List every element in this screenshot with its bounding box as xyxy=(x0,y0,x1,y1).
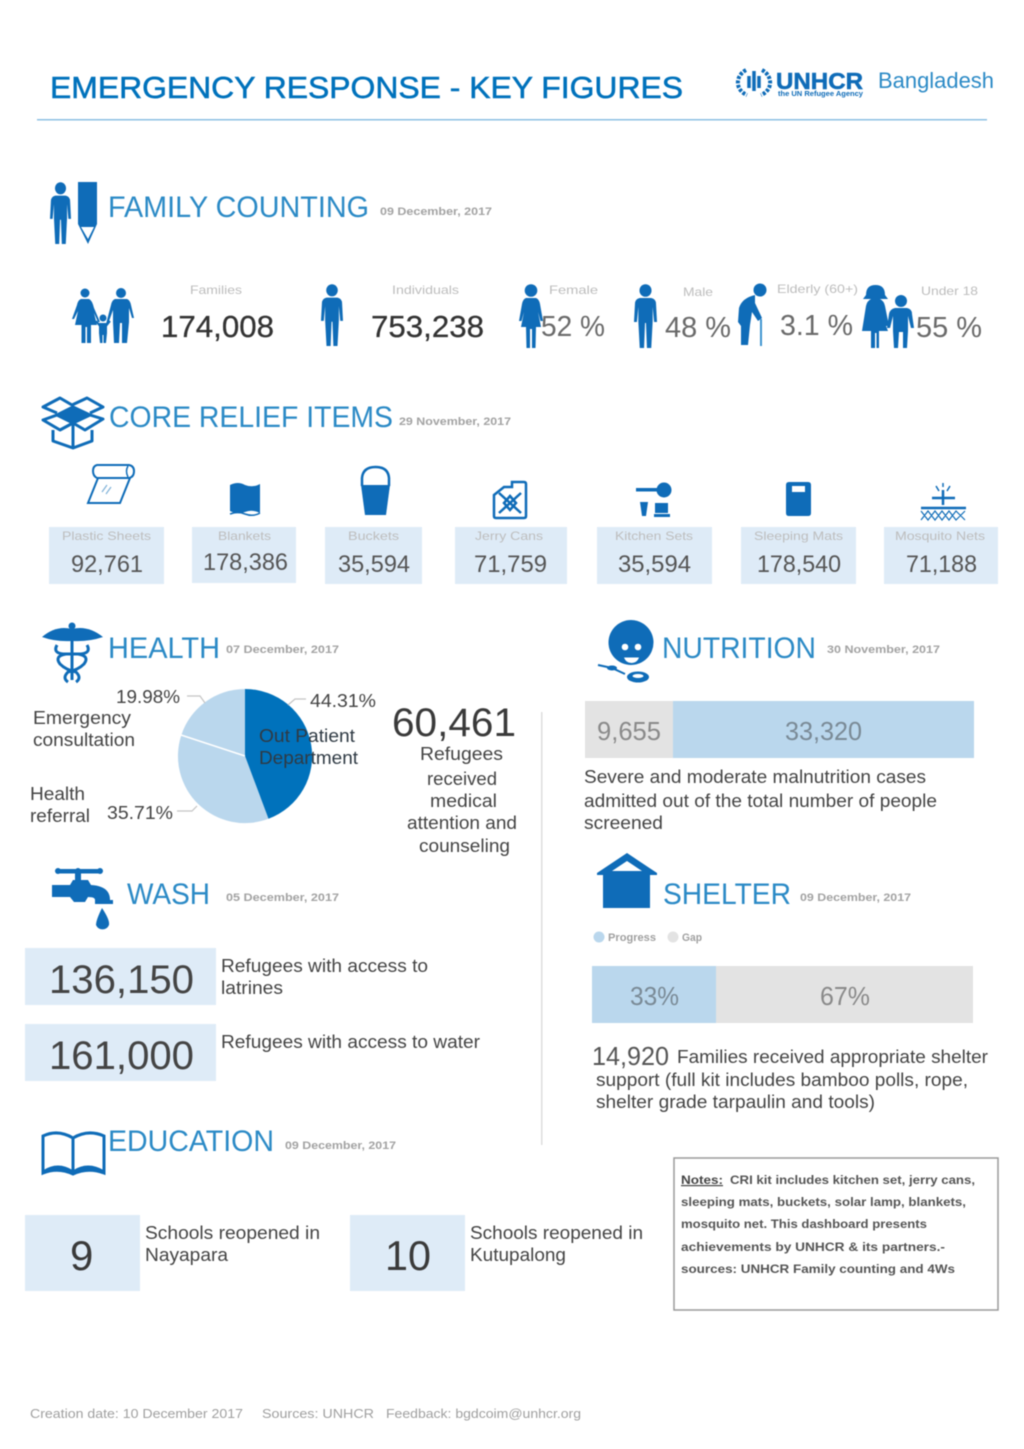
bar: malnutrition cases xyxy=(585,701,974,758)
text: shelter description: Families received appropriate shelter xyxy=(677,1047,988,1067)
card: jerry cans: Jerry Cans xyxy=(475,529,543,543)
text: Kutupalong schools: Kutupalong xyxy=(470,1245,566,1265)
text: latrines xyxy=(221,956,428,998)
card: mosquito nets xyxy=(884,527,998,584)
pie labels: 35.71% xyxy=(107,803,173,823)
callout: notes: CRI kit includes kitchen set, jerry cans, xyxy=(730,1173,975,1187)
text: Kutupalong schools xyxy=(470,1223,643,1265)
icon: sleeping mat xyxy=(786,482,811,516)
icon: UNHCR wreath xyxy=(738,70,770,95)
date: 09 December, 2017 xyxy=(285,1140,396,1152)
date: 09 December, 2017 xyxy=(380,206,492,218)
icon: family xyxy=(72,288,134,343)
pie labels: Health xyxy=(30,784,85,804)
pie labels xyxy=(30,687,376,826)
date: 30 November, 2017 xyxy=(827,644,940,656)
panel: education xyxy=(25,1125,643,1291)
stat: refugees received medical attention: medical xyxy=(430,791,497,811)
stat: individuals: 753,238 xyxy=(371,309,484,344)
heading: family counting: FAMILY COUNTING xyxy=(108,191,369,224)
heading: shelter: SHELTER xyxy=(663,878,791,911)
date: 07 December, 2017 xyxy=(226,644,339,656)
stat: female: Female xyxy=(549,283,598,297)
footer: Sources: UNHCR xyxy=(262,1406,374,1421)
panel: health xyxy=(30,622,517,856)
card: sleeping mats: Sleeping Mats xyxy=(754,529,843,543)
UNHCR wordmark: UNHCR xyxy=(776,68,863,94)
callout: notes: achievements by UNHCR & its partners.- xyxy=(681,1240,945,1254)
date: 09 December, 2017 xyxy=(800,892,911,904)
stat: families: Families xyxy=(190,283,242,297)
footer: Feedback: bgdcoim@unhcr.org xyxy=(386,1406,581,1421)
icon: female xyxy=(519,284,543,348)
icon: house xyxy=(597,853,657,908)
stat: families: 174,008 xyxy=(161,309,274,344)
heading: wash: WASH xyxy=(127,878,210,911)
Bangladesh: Bangladesh xyxy=(878,68,994,93)
card: plastic sheets: 92,761 xyxy=(71,551,143,578)
text: Kutupalong schools: Schools reopened in xyxy=(470,1223,643,1243)
card: latrines xyxy=(25,948,216,1005)
text: malnutrition description: admitted out of the total number of people xyxy=(584,791,937,811)
stat: under 18 xyxy=(916,284,982,344)
footer: Creation date: 10 December 2017 xyxy=(30,1406,243,1421)
panel: family counting xyxy=(50,182,982,348)
stat: male: Male xyxy=(683,285,713,299)
icon: bucket xyxy=(361,467,390,515)
card: kitchen sets: Kitchen Sets xyxy=(615,529,693,543)
icon: child face and spoon xyxy=(598,620,654,682)
panel: shelter xyxy=(592,853,988,1112)
text: Nayapara schools: Schools reopened in xyxy=(145,1223,320,1243)
pie labels: 44.31% xyxy=(310,691,376,711)
pie labels: 19.98% xyxy=(116,687,180,707)
icon: kitchen set xyxy=(636,482,672,517)
footer xyxy=(30,1406,581,1421)
card: plastic sheets xyxy=(49,527,164,584)
card: blankets: Blankets xyxy=(218,529,271,543)
bar: malnutrition cases: 33,320 xyxy=(785,716,862,746)
panel: nutrition xyxy=(584,620,974,833)
card: latrines: 136,150 xyxy=(49,958,194,1002)
stat: refugees received medical attention: counseling xyxy=(419,836,510,856)
card: sleeping mats: 178,540 xyxy=(757,551,841,578)
icon: male xyxy=(634,284,657,348)
pie labels: Department xyxy=(259,748,358,768)
text: latrines: latrines xyxy=(221,978,283,998)
panel: core relief items xyxy=(43,398,998,584)
callout: notes: sources: UNHCR Family counting and 4Ws xyxy=(681,1262,955,1276)
card: Nayapara schools xyxy=(25,1215,140,1291)
pie labels: referral xyxy=(30,806,90,826)
stat: refugees received medical attention xyxy=(392,701,517,856)
icon: jerry can xyxy=(494,482,526,518)
card: mosquito nets: 71,188 xyxy=(906,551,977,578)
heading: core relief items: CORE RELIEF ITEMS xyxy=(109,401,393,434)
icon: elderly xyxy=(738,284,766,346)
card: blankets: 178,386 xyxy=(203,549,288,576)
card: Kutupalong schools xyxy=(350,1215,465,1291)
callout: notes: sleeping mats, buckets, solar lamp, blankets, xyxy=(681,1195,966,1209)
logo: UNHCR Bangladesh xyxy=(738,68,994,98)
callout: notes: mosquito net. This dashboard presents xyxy=(681,1217,927,1231)
card: plastic sheets: Plastic Sheets xyxy=(62,529,151,543)
stat: refugees received medical attention: attention and xyxy=(407,813,517,833)
card: jerry cans xyxy=(455,527,567,584)
text: Nayapara schools xyxy=(145,1223,320,1265)
bar: shelter progress: 33% xyxy=(630,981,679,1011)
icon: open box xyxy=(43,398,103,448)
icon: individual xyxy=(321,284,343,346)
card: buckets: Buckets xyxy=(348,529,399,543)
text: malnutrition description xyxy=(584,767,937,833)
stat: refugees received medical attention: Refugees xyxy=(420,744,503,764)
card: water: 161,000 xyxy=(49,1034,194,1078)
card: buckets xyxy=(325,527,422,584)
stat: individuals xyxy=(371,283,484,344)
bar: malnutrition cases: 9,655 xyxy=(597,716,661,746)
text: shelter description: support (full kit includes bamboo polls, rope, xyxy=(596,1070,968,1090)
icon: open book xyxy=(43,1133,104,1174)
card: water xyxy=(25,1024,216,1081)
icon: person and pencil xyxy=(50,182,97,244)
bar: shelter progress xyxy=(592,966,973,1023)
pie labels: Emergency xyxy=(33,708,131,728)
text: latrines: Refugees with access to xyxy=(221,956,428,976)
stat: elderly xyxy=(777,282,858,342)
stat: families xyxy=(161,283,274,344)
pie labels: Out Patient xyxy=(259,726,355,746)
panel: wash xyxy=(25,868,480,1081)
legend: Gap xyxy=(682,932,702,944)
pie labels: consultation xyxy=(33,730,135,750)
text: Nayapara schools: Nayapara xyxy=(145,1245,229,1265)
card: sleeping mats xyxy=(741,527,856,584)
icon: mosquito net xyxy=(921,483,966,520)
stat: refugees received medical attention: 60,461 xyxy=(392,701,516,745)
stat: refugees received medical attention: received xyxy=(427,769,497,789)
date: 05 December, 2017 xyxy=(226,892,339,904)
stat: female xyxy=(541,283,605,343)
heading: education: EDUCATION xyxy=(108,1125,274,1158)
date: 29 November, 2017 xyxy=(399,416,511,428)
stat: elderly: 3.1 % xyxy=(780,310,853,342)
pie chart xyxy=(177,689,312,823)
heading: nutrition: NUTRITION xyxy=(662,632,816,665)
icon: blankets xyxy=(230,483,260,515)
card: Nayapara schools: 9 xyxy=(70,1232,93,1279)
stat: male xyxy=(665,285,731,344)
card: jerry cans: 71,759 xyxy=(474,551,547,578)
bar: shelter progress: 67% xyxy=(820,981,870,1011)
card: kitchen sets xyxy=(597,527,712,584)
card: mosquito nets: Mosquito Nets xyxy=(895,529,985,543)
stat: under 18: Under 18 xyxy=(921,284,978,298)
card: kitchen sets: 35,594 xyxy=(618,551,691,578)
tagline: the UN Refugee Agency xyxy=(778,91,863,98)
text: shelter description: shelter grade tarpaulin and tools) xyxy=(596,1092,875,1112)
icon: tap and drop xyxy=(52,868,113,929)
text: malnutrition description: screened xyxy=(584,813,663,833)
stat: under 18: 55 % xyxy=(916,312,982,344)
card: blankets xyxy=(192,527,296,583)
stat: male: 48 % xyxy=(665,312,731,344)
text: malnutrition description: Severe and moderate malnutrition cases xyxy=(584,767,926,787)
title: EMERGENCY RESPONSE - KEY FIGURES xyxy=(50,70,683,105)
heading: health: HEALTH xyxy=(108,632,220,665)
text: water: Refugees with access to water xyxy=(221,1032,480,1052)
legend xyxy=(594,932,702,944)
stat: female: 52 % xyxy=(541,311,605,343)
card: buckets: 35,594 xyxy=(338,551,410,578)
text: shelter description xyxy=(592,1041,988,1112)
stat: individuals: Individuals xyxy=(392,283,459,297)
callout: notes xyxy=(674,1158,998,1310)
stat: elderly: Elderly (60+) xyxy=(777,282,858,296)
icon: under 18 xyxy=(862,285,914,348)
callout: notes: Notes: xyxy=(681,1173,723,1187)
icon: plastic sheets xyxy=(88,465,134,503)
icon: caduceus xyxy=(42,622,103,682)
text: shelter description: 14,920 xyxy=(592,1041,669,1071)
legend: Progress xyxy=(608,932,656,944)
card: Kutupalong schools: 10 xyxy=(385,1232,431,1279)
